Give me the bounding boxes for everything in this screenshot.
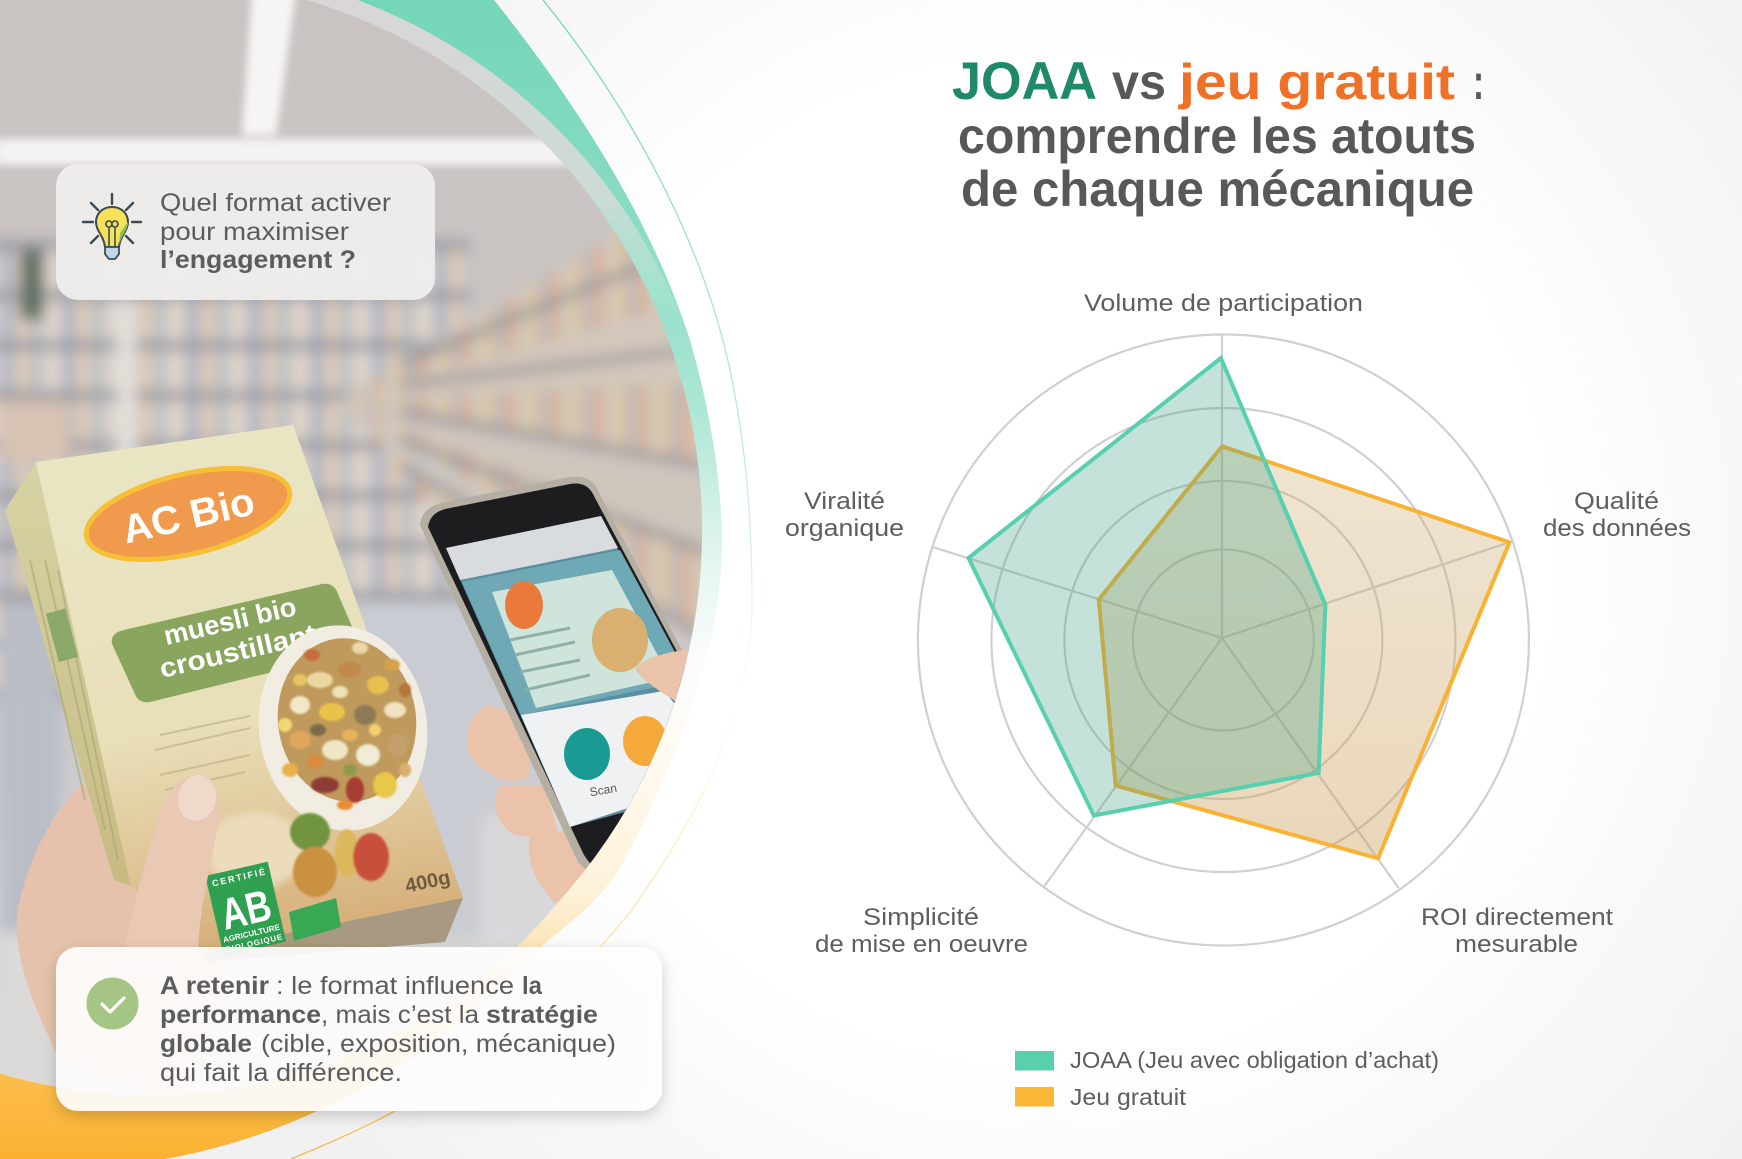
takeaway text: A retenir	[160, 972, 269, 1000]
muesli box	[5, 425, 463, 962]
title: vs	[1112, 54, 1166, 110]
axis labels	[785, 290, 1691, 958]
legend	[1015, 1047, 1439, 1110]
takeaway text: performance	[160, 1001, 321, 1029]
organic logo AB: CERTIFIÉ	[211, 867, 266, 889]
organic logo AB: AGRICULTURE	[222, 923, 281, 945]
smartphone	[420, 476, 686, 870]
right hand fingers	[467, 705, 590, 904]
flakes	[205, 812, 305, 888]
box side face	[5, 462, 131, 886]
axis labels: ROI directement	[1421, 904, 1613, 931]
question text: l’engagement ?	[160, 246, 356, 274]
takeaway text: qui fait la différence.	[160, 1059, 402, 1087]
icon: light bulb	[83, 194, 141, 259]
weight 400g: 400g	[403, 867, 452, 898]
ceiling lights	[0, 0, 595, 165]
title: de chaque mécanique	[961, 161, 1474, 217]
takeaway text	[160, 972, 616, 1087]
takeaway text: (cible, exposition, mécanique)	[261, 1030, 616, 1058]
logo AC Bio	[84, 466, 292, 562]
phone screen	[446, 516, 682, 827]
takeaway text: , mais c’est la	[321, 1001, 479, 1029]
axis labels: Viralité	[804, 488, 885, 515]
photo: supermarket aisle, hands, muesli box and phone	[0, 0, 740, 1100]
series: JOAA	[968, 358, 1325, 816]
thumbnail	[178, 775, 216, 821]
takeaway text: globale	[160, 1030, 252, 1058]
axis labels: Volume de participation	[1084, 290, 1363, 317]
question text: Quel format activer	[160, 189, 391, 217]
title: :	[1473, 54, 1484, 110]
bowl of muesli	[258, 625, 428, 830]
axis labels: de mise en oeuvre	[815, 931, 1028, 958]
title: comprendre les atouts	[958, 108, 1476, 164]
EU organic leaf	[289, 898, 341, 941]
product label: muesli bio	[161, 591, 299, 651]
axis labels: Simplicité	[863, 904, 979, 931]
title: JOAA	[952, 52, 1097, 111]
scanned flyer on screen	[492, 570, 670, 708]
box front face	[36, 425, 463, 960]
scan button	[564, 728, 610, 780]
legend: Jeu gratuit	[1070, 1084, 1187, 1110]
finger over the phone	[635, 649, 689, 701]
callout: key takeaway	[56, 947, 662, 1111]
smartphone: Scan	[589, 781, 618, 799]
soft ring around photo	[0, 0, 721, 1086]
axis labels: mesurable	[1455, 931, 1578, 958]
legend: JOAA (Jeu avec obligation d’achat)	[1070, 1047, 1439, 1073]
axis labels: Qualité	[1574, 488, 1659, 515]
takeaway text: la	[522, 972, 543, 1000]
second button	[623, 716, 667, 766]
title: jeu gratuit	[1178, 54, 1455, 110]
organic logo AB	[205, 862, 286, 956]
thumb	[137, 775, 220, 947]
product label: croustillant	[157, 619, 319, 684]
question text: pour maximiser	[160, 218, 349, 246]
thin accent arc	[291, 0, 752, 1159]
axis labels: organique	[785, 515, 904, 542]
callout: question	[56, 164, 435, 300]
organic logo AB: AB	[216, 881, 276, 940]
question text	[160, 189, 391, 274]
logo AC Bio: AC Bio	[118, 479, 259, 552]
fruits	[290, 813, 389, 897]
axis labels: des données	[1543, 515, 1691, 542]
radar chart	[785, 290, 1691, 958]
blurred shelves	[0, 234, 702, 1087]
takeaway text: stratégie	[486, 1001, 598, 1029]
grid rings and axes	[918, 334, 1529, 946]
icon: check mark	[86, 978, 138, 1030]
takeaway text: : le format influence	[276, 972, 514, 1000]
decorative crescent: green to orange gradient	[0, 0, 722, 1159]
left hand holding the box	[16, 782, 138, 1052]
scan panel	[521, 692, 674, 827]
product label	[112, 584, 357, 702]
organic logo AB: BIOLOGIQUE	[224, 932, 284, 954]
title	[952, 52, 1484, 217]
series: jeu gratuit	[1099, 446, 1510, 858]
small print	[155, 716, 250, 790]
